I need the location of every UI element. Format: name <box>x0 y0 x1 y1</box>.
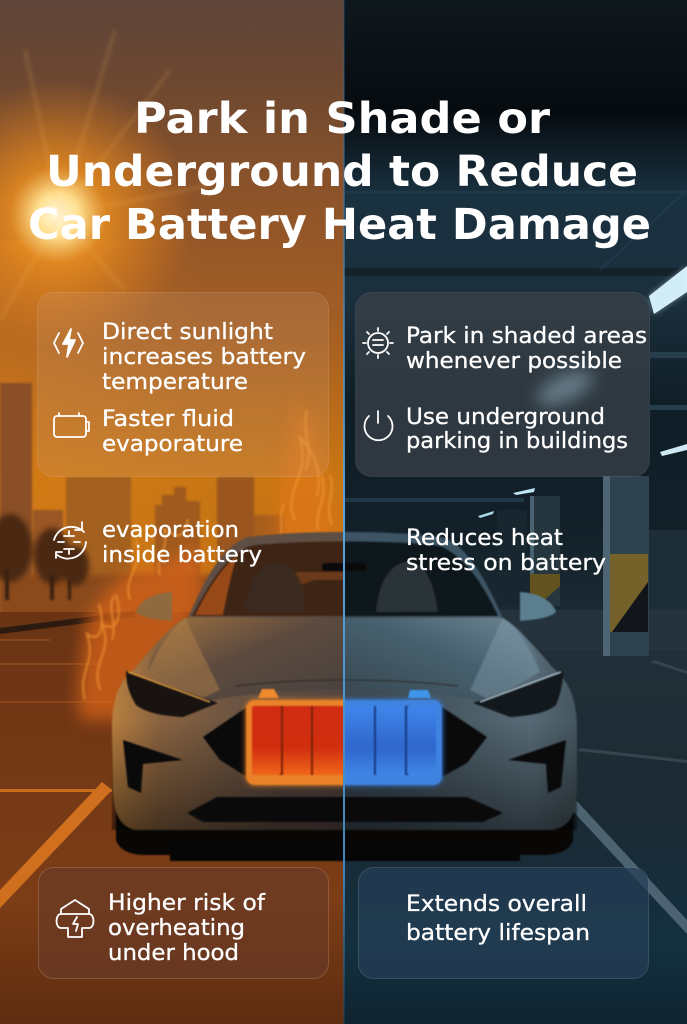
text: reduces heat stress: Reduces heat <box>406 525 563 551</box>
text: extends lifespan: battery lifespan <box>406 920 590 946</box>
mirrors <box>136 592 556 621</box>
text: underground parking: parking in buildings <box>406 428 628 454</box>
panel: parking tips <box>356 292 650 476</box>
text: faster fluid <box>102 406 243 457</box>
text: evaporation: inside battery <box>102 542 262 568</box>
car shadow and wheels <box>116 790 574 861</box>
right background: underground parking <box>344 0 687 1024</box>
text: direct sunlight: Direct sunlight <box>102 319 273 345</box>
text: park in shaded areas <box>406 323 647 374</box>
panel: battery lifespan <box>358 868 648 978</box>
center divider line <box>343 0 345 1024</box>
text: higher risk: overheating <box>108 915 245 941</box>
title: Underground to Reduce <box>46 147 638 197</box>
car <box>112 532 577 861</box>
text: direct sunlight: temperature <box>102 369 248 395</box>
text: extends lifespan: Extends overall <box>406 891 587 917</box>
text: direct sunlight <box>102 319 306 395</box>
text: underground parking: Use underground <box>406 404 605 430</box>
panel: sun heat effects <box>38 292 328 476</box>
flames around the car <box>78 391 338 720</box>
battery <box>246 689 442 785</box>
headlights <box>126 671 563 717</box>
text: reduces heat stress <box>406 525 606 576</box>
text: faster fluid: Faster fluid <box>102 406 234 432</box>
text: direct sunlight: increases battery <box>102 344 306 370</box>
text: higher risk: Higher risk of <box>108 890 266 916</box>
title <box>28 94 651 250</box>
grille and vents <box>123 707 566 822</box>
icon: lightning bolt <box>54 329 83 357</box>
text: reduces heat stress: stress on battery <box>406 550 606 576</box>
text: higher risk: under hood <box>108 940 239 966</box>
icon: evaporation cycle <box>54 522 86 559</box>
icon: battery <box>54 413 89 437</box>
parking pillar <box>603 476 649 656</box>
text: evaporation <box>102 517 262 568</box>
panel: overheating risk <box>38 868 328 978</box>
text: park in shaded areas: Park in shaded areas <box>406 323 647 349</box>
left background: hot sunlit city <box>0 0 344 1024</box>
text: park in shaded areas: whenever possible <box>406 348 622 374</box>
text: underground parking <box>406 404 628 454</box>
greenhouse and windshield <box>188 532 503 618</box>
title: Car Battery Heat Damage <box>28 200 651 250</box>
text: higher risk <box>108 890 266 966</box>
icon: hood with bolt <box>56 900 94 937</box>
text: evaporation: evaporation <box>102 517 239 543</box>
panel: evaporation inside battery <box>54 517 262 568</box>
text: faster fluid: evaporature <box>102 431 243 457</box>
text: extends lifespan <box>406 891 590 946</box>
title: Park in Shade or <box>134 94 551 144</box>
car body <box>112 616 577 830</box>
icon: power button <box>365 411 393 440</box>
icon: shaded sun <box>363 328 393 358</box>
